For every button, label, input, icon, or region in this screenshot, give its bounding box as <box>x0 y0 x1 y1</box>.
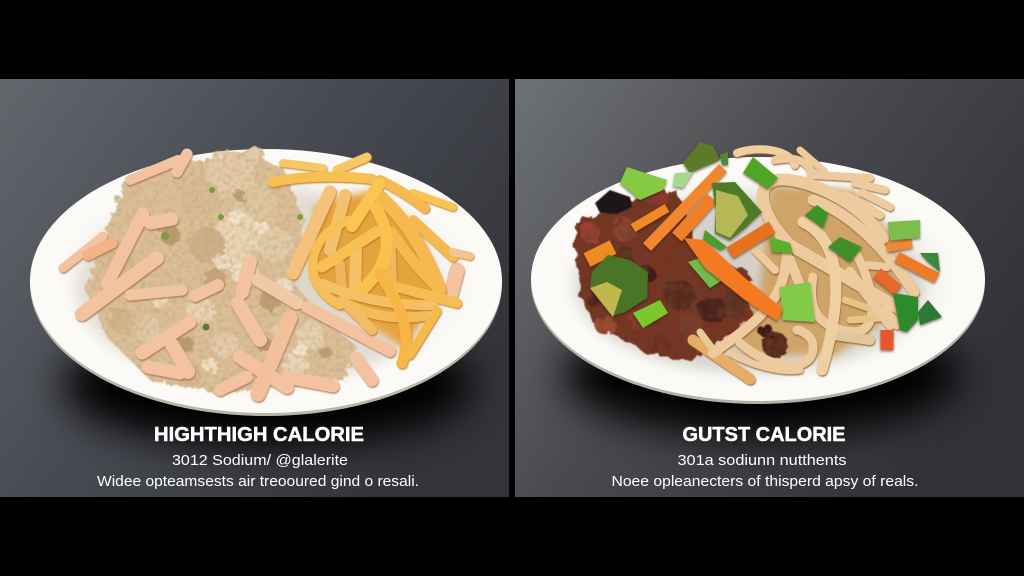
text: description: Widee opteamsests air treooured gind o resali. <box>97 473 419 490</box>
food: broccoli <box>590 142 762 317</box>
text: description: Noee opleanecters of thisperd apsy of reals. <box>612 473 918 490</box>
text: sodium line: 301a sodiunn nutthents <box>678 452 846 469</box>
food: crumb pile <box>85 146 357 393</box>
food: noodles base <box>725 185 900 355</box>
food: large carrot strip <box>684 238 783 321</box>
food: fries base <box>312 190 435 350</box>
food: carrots <box>587 168 937 350</box>
text: sodium line: 3012 Sodium/ @glalerite <box>172 452 348 469</box>
food: dark vegetable <box>595 190 632 214</box>
heading: gutst calorie: GUTST CALORIE <box>682 424 846 446</box>
heading: high calorie: HIGHTHIGH CALORIE <box>154 424 364 446</box>
panel: high calorie <box>0 79 509 497</box>
panel: gutst calorie <box>515 79 1024 497</box>
plate <box>30 149 502 416</box>
plate shadow <box>564 315 960 438</box>
food: herb flecks <box>161 187 303 330</box>
food: yellow fries <box>273 157 470 363</box>
plate shadow <box>63 323 473 448</box>
food: ground meat <box>575 184 788 362</box>
plate <box>531 157 985 404</box>
food: green peppers <box>620 157 942 332</box>
food: noodles <box>693 149 914 379</box>
food: pale fries <box>63 154 457 394</box>
